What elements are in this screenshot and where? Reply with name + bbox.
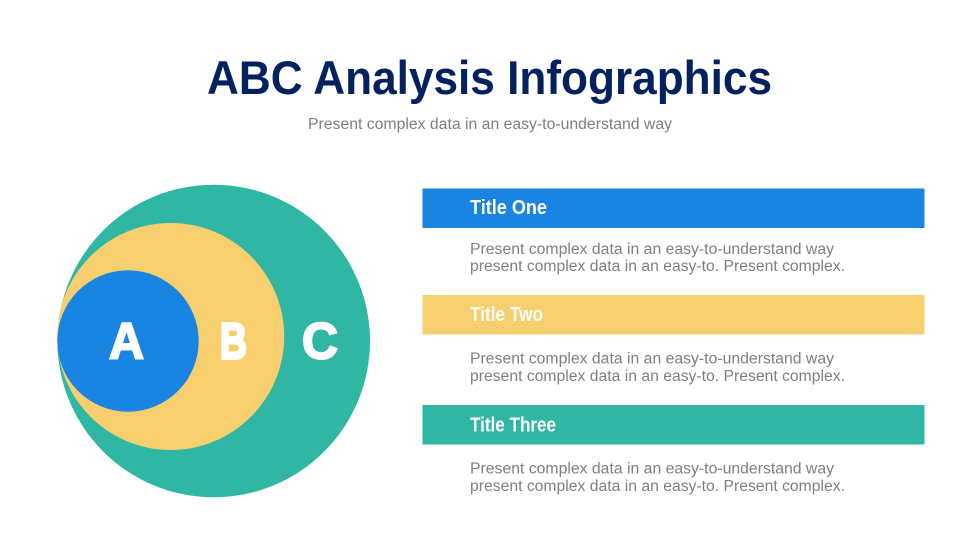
nested circle chart: [57, 185, 370, 497]
body text one: [470, 241, 845, 275]
circle A: [57, 270, 199, 412]
letter B: B: [220, 312, 247, 370]
panel: title one: [422, 188, 924, 275]
body text three: Present complex data in an easy-to-understand way: [470, 460, 834, 478]
body text one: present complex data in an easy-to. Present complex.: [470, 258, 845, 275]
body text two: Present complex data in an easy-to-understand way: [470, 350, 834, 368]
body text two: [470, 350, 845, 385]
title: ABC Analysis Infographics: [207, 51, 772, 104]
body text one: Present complex data in an easy-to-understand way: [470, 241, 834, 258]
body text three: present complex data in an easy-to. Present complex.: [470, 478, 845, 495]
letter A: A: [109, 312, 144, 370]
subtitle: Present complex data in an easy-to-understand way: [308, 116, 672, 133]
header bar two: [422, 295, 924, 334]
body text three: [470, 460, 845, 495]
heading three: Title Three: [470, 414, 556, 436]
letter C: C: [302, 312, 338, 370]
circle C: [57, 185, 370, 497]
header bar one: [422, 188, 924, 228]
header bar three: [422, 405, 924, 444]
heading one: Title One: [470, 197, 547, 219]
panel: title two: [422, 295, 924, 385]
panel: title three: [422, 405, 924, 495]
circle B: [57, 223, 284, 450]
heading two: Title Two: [470, 304, 543, 326]
body text two: present complex data in an easy-to. Present complex.: [470, 368, 845, 385]
